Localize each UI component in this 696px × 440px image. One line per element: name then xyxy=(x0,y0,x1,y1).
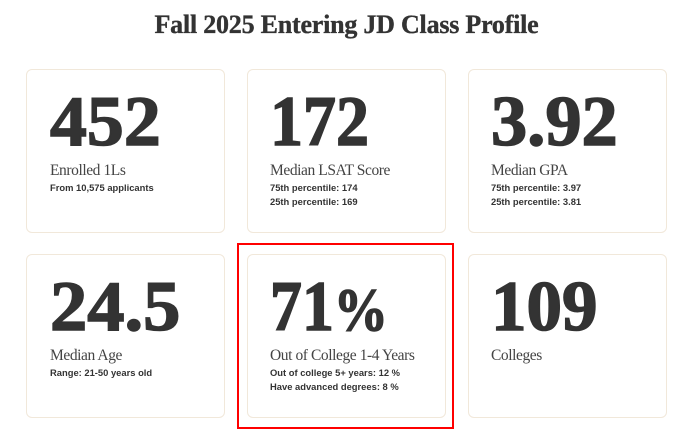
label: out of college 1-4 years: Out of College 1-4 Years xyxy=(270,347,414,364)
panel: median age xyxy=(26,254,225,418)
stat: 71%: 71% xyxy=(270,268,388,346)
label: enrolled 1Ls: Enrolled 1Ls xyxy=(50,162,125,179)
detail: LSAT percentiles xyxy=(270,182,358,207)
stat: 172: 172 xyxy=(270,83,369,161)
panel: out of college xyxy=(247,254,446,418)
detail: GPA percentiles xyxy=(491,182,581,207)
detail: GPA percentiles: 75th percentile: 3.97 xyxy=(491,182,581,193)
detail: LSAT percentiles: 25th percentile: 169 xyxy=(270,196,358,207)
label: colleges: Colleges xyxy=(491,347,542,364)
detail: other experience: Have advanced degrees: 8 % xyxy=(270,381,399,392)
detail: LSAT percentiles: 75th percentile: 174 xyxy=(270,182,358,193)
detail: applicants: From 10,575 applicants xyxy=(50,182,154,193)
panel: median LSAT xyxy=(247,69,446,233)
detail: GPA percentiles: 25th percentile: 3.81 xyxy=(491,196,581,207)
detail: other experience xyxy=(270,367,400,392)
stat: 24.5: 24.5 xyxy=(50,268,180,346)
label: median age: Median Age xyxy=(50,347,122,364)
detail: age range: Range: 21-50 years old xyxy=(50,367,152,378)
panel: colleges xyxy=(468,254,667,418)
highlight box xyxy=(237,243,454,429)
title: Fall 2025 Entering JD Class Profile xyxy=(155,10,538,39)
panel: enrolled 1Ls xyxy=(26,69,225,233)
stat: 3.92: 3.92 xyxy=(491,83,618,161)
panel: median GPA xyxy=(468,69,667,233)
label: median LSAT score: Median LSAT Score xyxy=(270,162,390,179)
label: median GPA: Median GPA xyxy=(491,162,568,179)
detail: other experience: Out of college 5+ years: 12 % xyxy=(270,367,400,378)
stat: 452: 452 xyxy=(50,83,161,161)
stat: 109: 109 xyxy=(491,268,598,346)
